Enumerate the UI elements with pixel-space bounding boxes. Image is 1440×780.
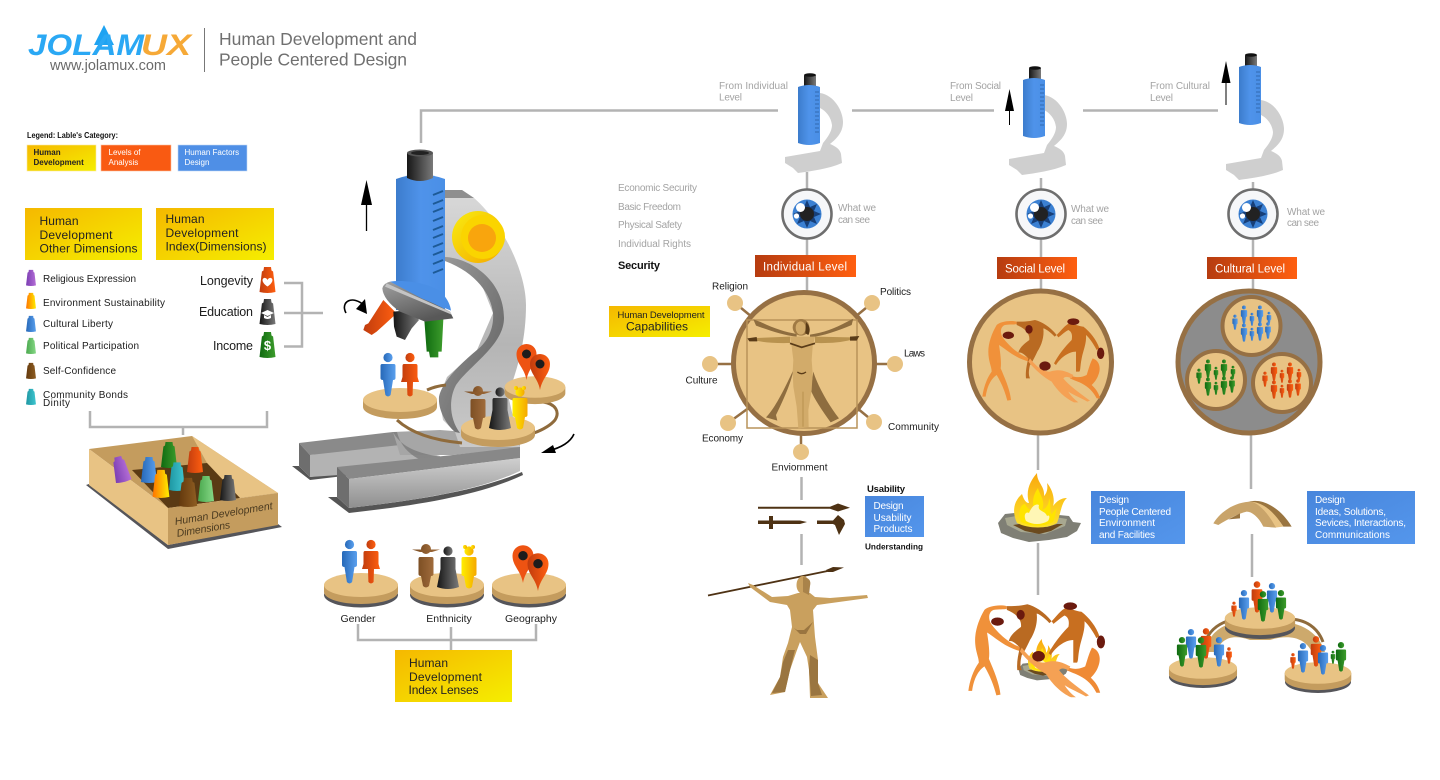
heading: index dimensions: [156, 208, 274, 260]
list: other dimensions: Dinity: [43, 398, 70, 409]
from labels: Level: [719, 92, 742, 104]
box label: Human Development: [174, 500, 275, 528]
design box: social: [1091, 491, 1185, 544]
design box: individual: Design: [874, 501, 904, 512]
connector: lenses: [358, 624, 536, 650]
stage: geography: [505, 344, 565, 404]
security list: Physical Safety: [618, 220, 682, 231]
mini microscope: individual: [785, 73, 843, 173]
weapons: [758, 504, 850, 535]
capability labels: Politics: [880, 287, 911, 298]
stone arch: [1213, 501, 1292, 528]
design box: social: Environment: [1099, 518, 1155, 529]
heading: index dimensions: Human: [166, 212, 204, 226]
legend: human development: [27, 145, 96, 171]
design box: social: Design: [1099, 495, 1129, 506]
mini microscope: cultural: [1226, 53, 1284, 180]
lenses: geography: Geography: [505, 613, 558, 625]
list: other dimensions: Self-Confidence: [43, 366, 116, 377]
platform: right group: [1285, 636, 1351, 693]
security list: Economic Security: [618, 183, 697, 194]
rotating ring: [397, 385, 557, 443]
legend: human factors design: Human Factors: [184, 148, 239, 157]
heading: other dimensions: Development: [40, 228, 113, 242]
connector: top horizontal lines: [421, 110, 1218, 143]
capability labels: Enviornment: [772, 462, 828, 474]
capability labels: Economy: [702, 434, 743, 444]
from labels: From Cultural: [1150, 81, 1210, 92]
logo: Jolamux: www.jolamux.com: [49, 58, 166, 74]
objective lenses: [363, 300, 443, 357]
from labels: From Social: [950, 81, 1001, 92]
lenses: gender: [324, 540, 398, 625]
capability labels: Religion: [712, 282, 748, 292]
heading: other dimensions: Other Dimensions: [40, 242, 138, 256]
usability labels: [865, 484, 924, 552]
arrow: social up: [1005, 89, 1014, 125]
heading: capabilities: Capabilities: [626, 320, 688, 334]
platform: left group: [1169, 628, 1237, 688]
vitruvian man: [747, 319, 859, 428]
list: index dimensions: Income: [213, 339, 253, 353]
label: cultural level: Cultural Level: [1215, 264, 1285, 276]
legend: [27, 130, 247, 171]
usability labels: Usability: [867, 484, 906, 495]
stage: ethnicity: [461, 386, 535, 447]
label: individual level: Individual Level: [763, 262, 847, 274]
security list: [618, 183, 697, 272]
what we can see labels: can see: [1287, 218, 1319, 229]
box label: [174, 500, 277, 540]
what we can see labels: [838, 203, 1325, 229]
connector: index to microscope: [284, 283, 323, 346]
design box: social: People Centered: [1099, 507, 1171, 518]
microscope arm: [439, 190, 526, 447]
usability labels: Understanding: [865, 542, 923, 552]
title: [204, 28, 417, 72]
eye: cultural: [1228, 190, 1278, 238]
focus knob: [452, 211, 505, 263]
lenses: ethnicity: Enthnicity: [426, 613, 473, 625]
campfire: [998, 473, 1081, 542]
crowd: blue: [1222, 297, 1280, 355]
microscope base: [292, 430, 523, 513]
eye: individual: [782, 190, 832, 238]
heading: other dimensions: [25, 208, 142, 260]
list: other dimensions: Religious Expression: [43, 274, 136, 285]
dance around fire: [968, 602, 1105, 697]
connector: dimensions to box: [90, 411, 267, 435]
capability labels: [686, 282, 939, 474]
heading: capabilities: Human Development: [618, 310, 705, 321]
stage: gender: [363, 353, 437, 419]
design box: social: and Facilities: [1099, 530, 1155, 541]
list: other dimensions: Political Participation: [43, 341, 139, 352]
title: Human Development and: [219, 29, 417, 49]
heading: capabilities: [609, 306, 710, 337]
list: other dimensions: Community Bonds: [43, 390, 128, 401]
arrow: rotate: [344, 299, 367, 314]
from labels: From Individual: [719, 81, 788, 92]
security list: Basic Freedom: [618, 202, 681, 213]
connected communities: [1169, 581, 1351, 693]
arrow: up: [361, 180, 372, 231]
design box: cultural: Sevices, Interactions,: [1315, 518, 1406, 529]
what we can see labels: can see: [838, 215, 870, 226]
legend: human development: Development: [34, 158, 84, 167]
what we can see labels: What we: [838, 203, 876, 214]
design box: individual: Usability: [874, 513, 912, 524]
box label: Dimensions: [176, 519, 232, 540]
what we can see labels: can see: [1071, 216, 1103, 227]
heading: index dimensions: Development: [166, 226, 239, 240]
capability nodes: [702, 295, 903, 460]
eyepiece: [407, 150, 433, 181]
platform: top group: [1225, 581, 1295, 639]
nosepiece: [382, 281, 453, 322]
connector: column lines: [802, 172, 1253, 595]
arrow: cultural up: [1222, 61, 1230, 105]
crowd: red: [1253, 354, 1311, 412]
design box: individual: [865, 496, 924, 537]
heading: index lenses: Development: [409, 670, 483, 684]
dance figures: [982, 318, 1104, 402]
legend: levels of analysis: Analysis: [108, 158, 138, 167]
crowd: green: [1187, 351, 1245, 409]
main microscope: [292, 150, 574, 513]
legend: levels of analysis: [101, 145, 171, 171]
security list: Individual Rights: [618, 239, 691, 250]
box: human development dimensions: [86, 436, 282, 549]
design box: cultural: [1307, 491, 1415, 544]
list: index dimensions: Longevity: [200, 274, 254, 288]
label: individual level: [755, 255, 856, 277]
from labels: [719, 81, 1210, 104]
legend: Legend: Lable's Category:: [27, 130, 118, 140]
list: other dimensions: [26, 270, 165, 409]
lenses: ethnicity: [410, 544, 484, 625]
lenses: geography: [492, 545, 566, 625]
list: other dimensions: Cultural Liberty: [43, 319, 113, 330]
heading: other dimensions: Human: [40, 214, 78, 228]
capability spokes: [710, 303, 895, 452]
design box: individual: Products: [874, 524, 912, 535]
design box: cultural: Communications: [1315, 530, 1390, 541]
label: social level: [997, 257, 1077, 279]
list: index dimensions: Education: [199, 305, 253, 319]
social level circle: [970, 291, 1112, 433]
label: cultural level: [1207, 257, 1297, 279]
security list: Security: [618, 260, 661, 272]
logo: Jolamux: UX: [141, 29, 193, 62]
mini microscope: social: [1009, 66, 1067, 175]
individual level circle: [702, 292, 903, 460]
arches: [1204, 622, 1325, 652]
list: other dimensions: Environment Sustainability: [43, 298, 165, 309]
eye: social: [1016, 190, 1066, 238]
heading: index lenses: Human: [409, 656, 448, 670]
what we can see labels: What we: [1287, 207, 1325, 218]
capability labels: Culture: [686, 376, 718, 386]
logo: Jolamux: JOLAM: [28, 29, 145, 62]
title: People Centered Design: [219, 50, 407, 70]
heading: index lenses: [395, 650, 512, 702]
heading: index lenses: Index Lenses: [408, 683, 478, 697]
list: index dimensions: [199, 267, 276, 358]
vitruvian square: [747, 320, 857, 428]
design box: cultural: Ideas, Solutions,: [1315, 507, 1386, 518]
arrow: turn: [541, 434, 574, 453]
capability labels: Laws: [904, 348, 925, 360]
design box: cultural: Design: [1315, 495, 1345, 506]
legend: human factors design: [178, 145, 247, 171]
capability labels: Community: [888, 422, 939, 433]
legend: levels of analysis: Levels of: [108, 148, 141, 157]
what we can see labels: What we: [1071, 204, 1109, 215]
cultural level circle: [1178, 291, 1320, 433]
tube: [396, 174, 445, 310]
from labels: Level: [950, 93, 973, 104]
legend: human development: Human: [34, 148, 61, 157]
from labels: Level: [1150, 93, 1173, 104]
logo: Jolamux: [28, 25, 193, 74]
lenses: gender: Gender: [340, 613, 376, 625]
list: index dimensions: $: [264, 338, 272, 353]
legend: human factors design: Design: [184, 158, 209, 167]
greek figure with spear: [708, 567, 868, 698]
label: social level: Social Level: [1005, 264, 1065, 276]
heading: index dimensions: Index(Dimensions): [166, 240, 266, 254]
